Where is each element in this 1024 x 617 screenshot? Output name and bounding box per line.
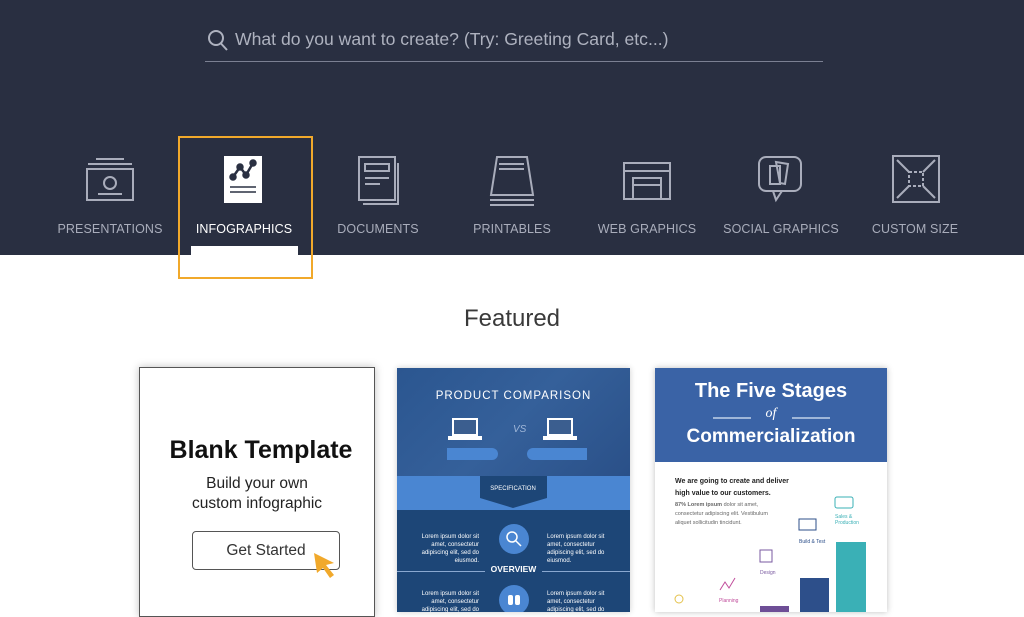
row 1: Lorem ipsum dolor sit amet, consectetur adipiscing elit, sed do eiusmod. xyxy=(422,534,479,564)
header xyxy=(655,368,887,462)
text: CUSTOM SIZE xyxy=(872,222,958,236)
text: SOCIAL GRAPHICS xyxy=(723,222,839,236)
card: five stages: 87% Lorem ipsum dolor sit amet, consectetur adipiscing elit. Vestibulum aliquet sollicitudin tincidunt. xyxy=(675,502,768,526)
nav: web graphics xyxy=(598,162,696,236)
laptops: VS xyxy=(513,424,527,435)
bar chart: Planning xyxy=(719,598,739,604)
bar chart xyxy=(674,496,866,612)
icon: search xyxy=(208,30,228,50)
overview divider xyxy=(397,571,630,572)
specification band xyxy=(397,476,630,510)
nav: printables xyxy=(473,156,551,236)
bar chart: Design xyxy=(760,570,776,576)
nav: custom size xyxy=(872,155,958,236)
text: PRINTABLES xyxy=(473,222,551,236)
bar chart: Build & Test xyxy=(799,539,826,545)
photo header xyxy=(397,368,630,476)
icon: cursor xyxy=(314,553,334,578)
bar chart: Sales & xyxy=(835,514,853,520)
card: product comparison: SPECIFICATION xyxy=(490,486,536,492)
card: blank template xyxy=(139,367,375,617)
white tab indicator xyxy=(191,246,298,256)
nav: social graphics xyxy=(723,156,839,236)
intro text: We are going to create and deliver high value to our customers. xyxy=(675,478,789,497)
text: WEB GRAPHICS xyxy=(598,222,696,236)
laptops xyxy=(447,418,587,460)
nav: documents xyxy=(337,156,419,236)
header title: PRODUCT COMPARISON xyxy=(436,390,591,402)
bar chart: Production xyxy=(835,520,859,526)
text: DOCUMENTS xyxy=(337,222,419,236)
card title: Blank Template xyxy=(170,436,352,464)
card: five stages xyxy=(655,368,887,612)
button: get started xyxy=(192,531,340,570)
selected tab highlight xyxy=(178,136,313,279)
header: of xyxy=(766,406,776,421)
card: product comparison: OVERVIEW xyxy=(491,564,536,574)
card subtitle: custom infographic xyxy=(192,495,322,512)
card: product comparison: Lorem ipsum dolor sit amet, consectetur adipiscing elit, sed do eiusmod. xyxy=(547,534,604,564)
text: INFOGRAPHICS xyxy=(196,222,292,236)
card subtitle xyxy=(192,475,322,512)
header: The Five Stages xyxy=(695,380,847,402)
nav: infographics xyxy=(196,156,292,236)
nav: presentations xyxy=(57,158,163,236)
text: PRESENTATIONS xyxy=(57,222,163,236)
button: get started: Get Started xyxy=(226,542,306,559)
header: Commercialization xyxy=(687,426,855,447)
search bar xyxy=(205,26,823,62)
header band xyxy=(0,0,1024,255)
card: product comparison xyxy=(397,368,630,612)
heading: Featured: Featured xyxy=(464,305,560,332)
search placeholder: What do you want to create? (Try: Greeting Card, etc...) xyxy=(235,29,669,49)
card subtitle: Build your own xyxy=(206,475,308,492)
